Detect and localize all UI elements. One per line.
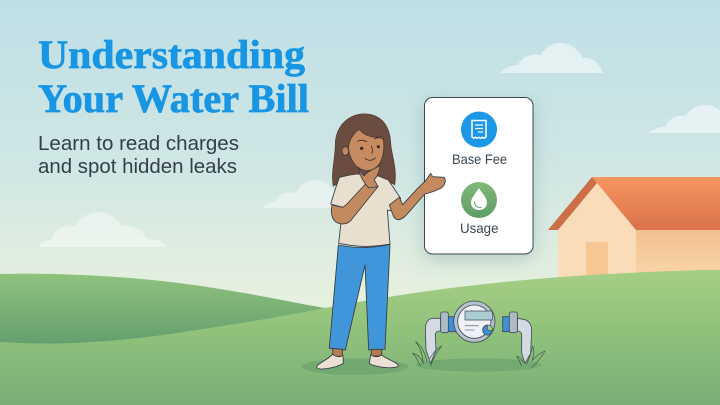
subtitle: Learn to read charges <box>38 132 239 155</box>
panel: bill card <box>424 98 533 254</box>
face <box>348 129 384 171</box>
shoes <box>317 354 398 369</box>
water meter <box>413 301 545 372</box>
figure: woman pointing at card <box>302 114 445 375</box>
pipe flanges <box>441 312 517 333</box>
facial features <box>358 138 383 160</box>
hand at chin <box>359 165 380 188</box>
meter text lines <box>465 326 478 330</box>
cloud: behind figure <box>262 180 340 208</box>
ear <box>342 147 349 155</box>
meter ground shadow <box>415 358 542 372</box>
title: Your Water Bill <box>38 76 309 121</box>
hair <box>333 114 395 186</box>
label: base fee: Base Fee <box>452 151 507 167</box>
house <box>548 177 720 285</box>
cloud: top right <box>500 43 603 73</box>
meter dial <box>458 305 491 338</box>
title: Understanding <box>38 32 305 77</box>
house door <box>586 242 608 278</box>
connectors <box>448 317 510 332</box>
left arm <box>331 178 378 224</box>
figure ground shadow <box>302 358 408 375</box>
meter body <box>454 301 495 342</box>
icon: receipt <box>461 112 497 148</box>
subtitle: and spot hidden leaks <box>38 155 237 178</box>
front hill <box>0 270 720 405</box>
card background <box>424 98 533 254</box>
house gable edge <box>548 177 597 230</box>
right pipe <box>517 318 532 363</box>
house side wall <box>636 230 720 282</box>
label: usage: Usage <box>460 220 499 236</box>
grass left <box>413 342 442 366</box>
grass right <box>517 346 545 367</box>
meter gauge <box>483 325 493 335</box>
subtitle <box>38 132 239 178</box>
meter display <box>465 311 492 320</box>
ankles <box>333 348 382 357</box>
left pipe <box>425 318 441 363</box>
icon: water drop <box>461 182 497 218</box>
pants <box>329 244 390 350</box>
house roof <box>592 177 720 230</box>
house front wall <box>558 183 636 285</box>
back hill <box>0 274 325 345</box>
cloud: lower left <box>38 212 167 247</box>
title <box>38 32 309 121</box>
cloud: right edge <box>649 105 720 133</box>
right arm and hand <box>389 173 445 220</box>
shirt <box>331 174 401 246</box>
